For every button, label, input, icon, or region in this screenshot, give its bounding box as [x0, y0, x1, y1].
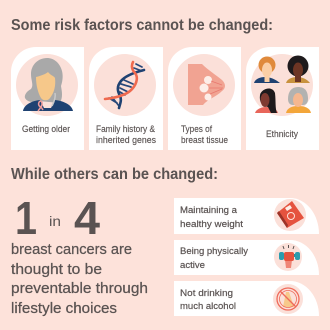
panel: healthy weight: healthy weight — [180, 219, 243, 230]
icon: breast tissue — [188, 64, 225, 105]
title: risk factors that cannot be changed: Some risk factors cannot be changed: — [11, 17, 273, 34]
text: preventable statement: thought to be — [11, 262, 102, 278]
label: not drinking alcohol: Not drinking — [180, 288, 233, 299]
icon: DNA helix — [105, 62, 144, 108]
statistic: 1 in 4: 4 — [74, 192, 100, 244]
icon: no alcohol — [277, 288, 299, 310]
icon: older woman with ribbon — [23, 58, 73, 111]
statistic: 1 in 4 — [15, 192, 100, 244]
icon: red book with apple — [277, 201, 304, 228]
panel: family history: inherited genes — [96, 135, 156, 145]
panel: physically active: active — [180, 260, 205, 271]
panel: not drinking alcohol — [174, 281, 319, 316]
panel: healthy weight — [174, 198, 319, 234]
panel: breast tissue — [168, 47, 241, 150]
text: preventable statement: lifestyle choices — [11, 301, 117, 317]
heading: others can be changed: While others can be changed: — [11, 166, 218, 183]
label: healthy weight: Maintaining a — [180, 205, 238, 216]
text: preventable statement: preventable through — [11, 281, 148, 297]
label: physically active: Being physically — [180, 246, 248, 257]
statistic: 1 in 4: in — [49, 213, 61, 229]
text: preventable statement: breast cancers are — [11, 242, 132, 258]
label: getting older: Getting older — [22, 124, 70, 134]
label: breast tissue: Types of — [181, 124, 212, 134]
label: family history: Family history & — [96, 124, 155, 134]
panel: not drinking alcohol: much alcohol — [180, 301, 236, 312]
panel: breast tissue: breast tissue — [181, 135, 228, 145]
icon: four women — [254, 56, 311, 113]
panel: physically active — [174, 240, 319, 275]
label: ethnicity: Ethnicity — [266, 129, 298, 139]
panel: family history — [89, 47, 163, 150]
text: preventable statement — [11, 242, 148, 317]
panel: ethnicity — [246, 47, 319, 150]
panel: getting older — [11, 47, 84, 150]
statistic: 1 in 4: 1 — [15, 192, 37, 244]
icon: fist with dumbbell — [279, 245, 300, 268]
